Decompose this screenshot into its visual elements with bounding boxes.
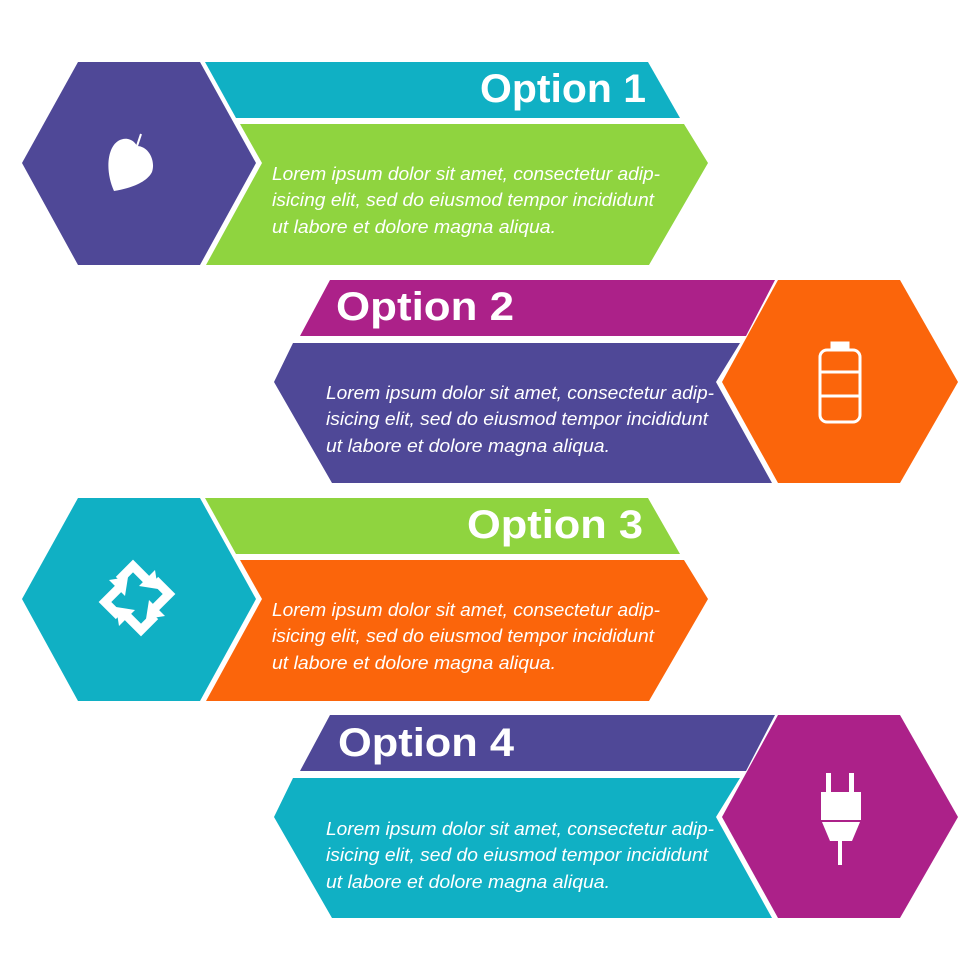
hexagon: option 2 [722,280,958,483]
hexagon: option 3 [22,498,256,701]
text block: option 2: Lorem ipsum dolor sit amet, consectetur adip- [326,383,714,403]
hexagon: option 1 [22,62,256,265]
panel: option 1 [22,62,708,265]
banner: option 3 [205,498,680,554]
panel: option 2 [274,280,958,483]
heading: Option 3: Option 3 [467,503,643,547]
text block: option 2: ut labore et dolore magna aliqua. [326,436,610,456]
text block: option 4 [326,819,714,892]
text block: option 4: ut labore et dolore magna aliqua. [326,872,610,892]
text panel: option 1 [206,124,708,265]
icon: recycle arrows [105,566,169,630]
text panel: option 2 [274,343,772,483]
icon: plug [821,773,861,865]
text block: option 1: isicing elit, sed do eiusmod tempor incididunt [272,190,655,210]
text panel: option 4 [274,778,772,918]
banner: option 2 [300,280,775,336]
icon: battery [820,343,860,422]
text block: option 4: Lorem ipsum dolor sit amet, consectetur adip- [326,819,714,839]
icon: leaf [108,134,153,191]
text block: option 1 [272,164,660,237]
text block: option 3 [272,600,660,673]
text block: option 2 [326,383,714,456]
panel: option 3 [22,498,708,701]
text block: option 2: isicing elit, sed do eiusmod tempor incididunt [326,409,709,429]
panel: option 4 [274,715,958,918]
text panel: option 3 [206,560,708,701]
hexagon: option 4 [722,715,958,918]
banner: option 4 [300,715,775,771]
text block: option 1: Lorem ipsum dolor sit amet, consectetur adip- [272,164,660,184]
heading: Option 4: Option 4 [338,721,515,765]
banner: option 1 [205,62,680,118]
heading: Option 2: Option 2 [336,285,514,329]
text block: option 4: isicing elit, sed do eiusmod tempor incididunt [326,845,709,865]
heading: Option 1: Option 1 [480,67,646,111]
text block: option 3: Lorem ipsum dolor sit amet, consectetur adip- [272,600,660,620]
text block: option 1: ut labore et dolore magna aliqua. [272,217,556,237]
text block: option 3: ut labore et dolore magna aliqua. [272,653,556,673]
text block: option 3: isicing elit, sed do eiusmod tempor incididunt [272,626,655,646]
